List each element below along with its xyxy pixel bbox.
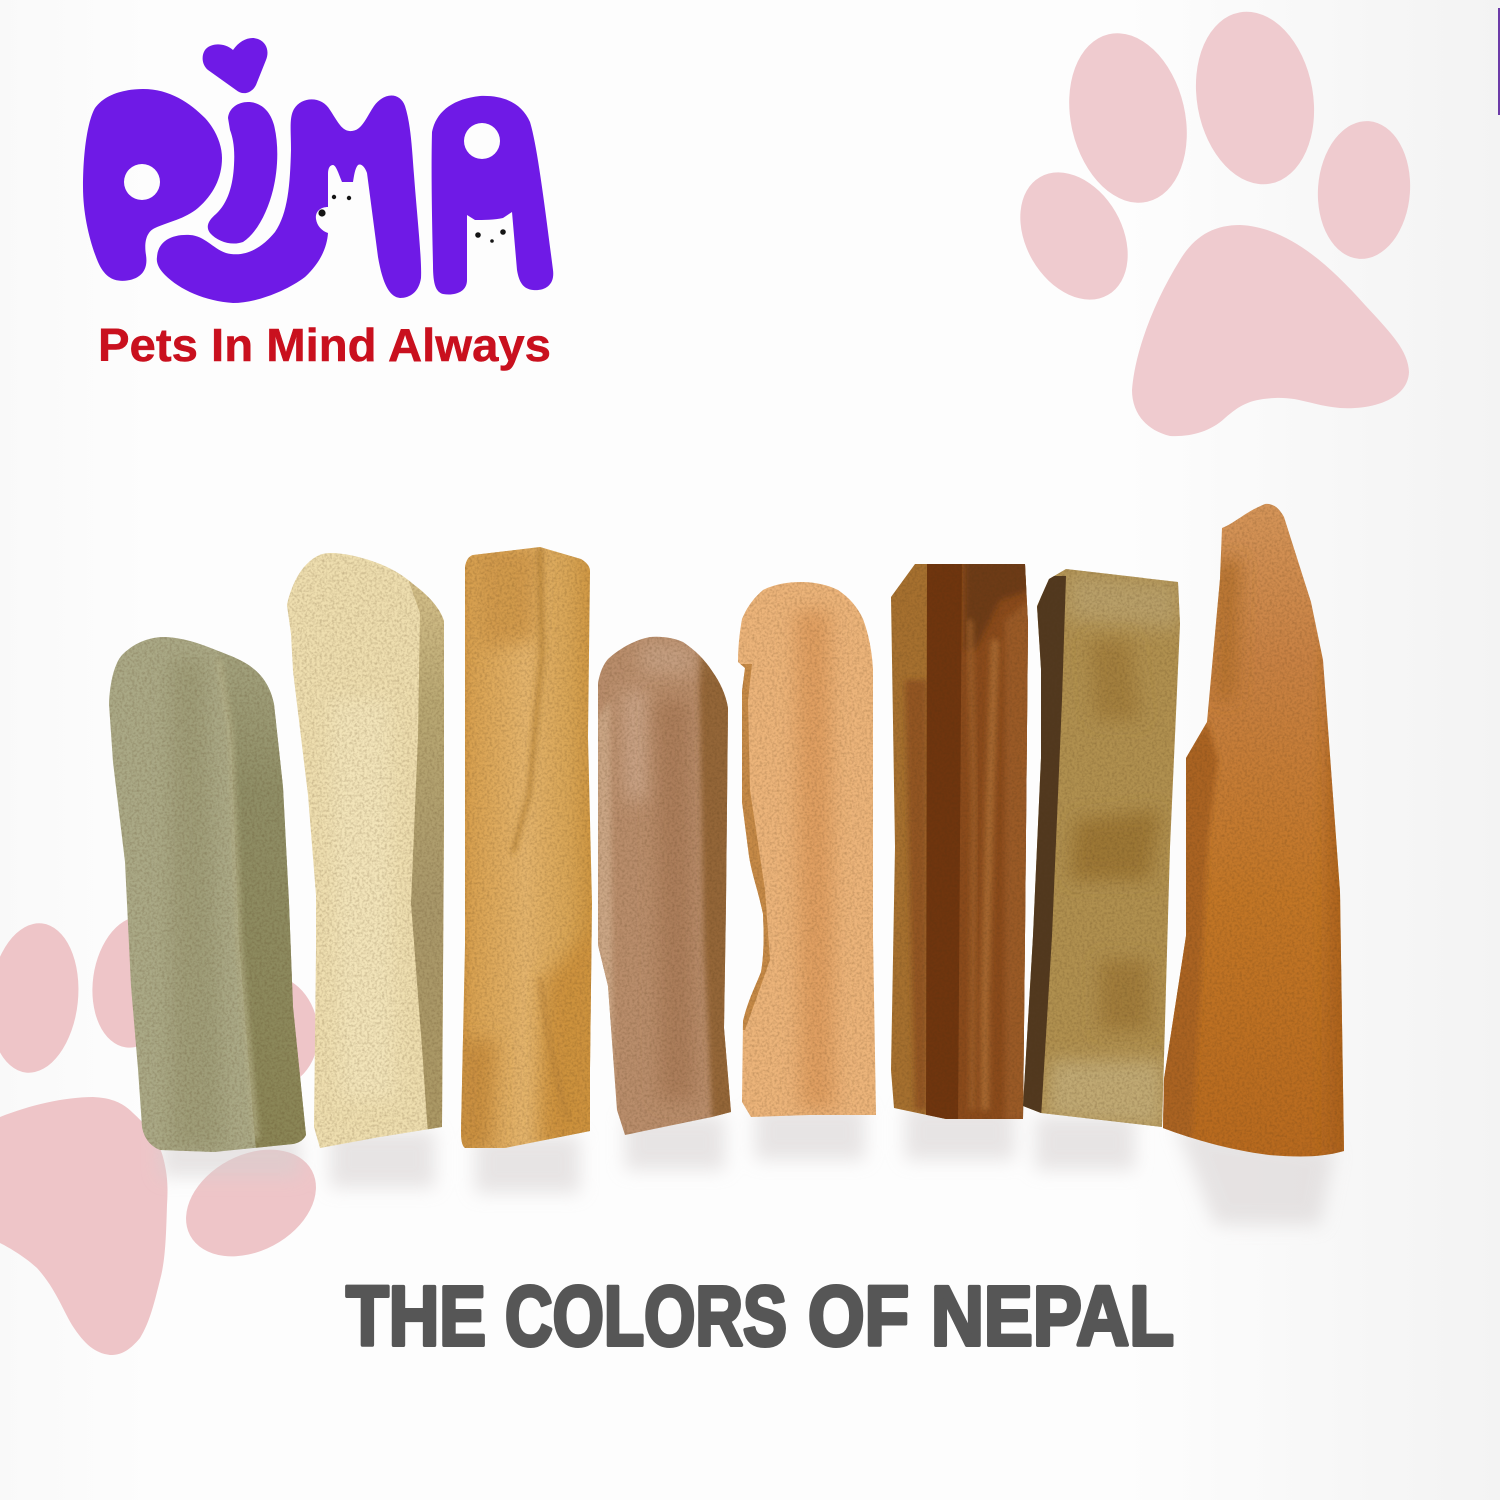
chew 4: translucent brown (598, 636, 731, 1135)
icon: pink paw print bottom left (0, 911, 334, 1355)
chew 8: long tapered orange brown (1155, 495, 1350, 1165)
title: COLORS (505, 1269, 787, 1363)
title: THE (346, 1269, 486, 1363)
tagline: Pets In Mind Always (98, 319, 551, 371)
logo heart (203, 38, 267, 93)
chew 3: amber woven (461, 547, 592, 1148)
chew 1: green (100, 630, 310, 1160)
shadows under chews (160, 1105, 1335, 1225)
title: NEPAL (931, 1269, 1174, 1363)
chew 2: cream (280, 545, 450, 1155)
logo letter M and J curve with dog (157, 96, 421, 303)
logo letter P (83, 89, 222, 281)
logo cat face dots (475, 229, 506, 243)
chew 5: orange smooth (738, 582, 876, 1117)
logo dog face dots (318, 195, 351, 217)
title (346, 1269, 1174, 1363)
title: OF (808, 1269, 909, 1363)
icon: large pink paw print top right (998, 2, 1415, 436)
chew 7: olive brown (1023, 569, 1180, 1127)
chew 6: dark brown (891, 564, 1028, 1119)
logo: PIMA (83, 38, 553, 303)
logo letter A with cat (432, 96, 553, 294)
logo letter I (208, 102, 277, 244)
